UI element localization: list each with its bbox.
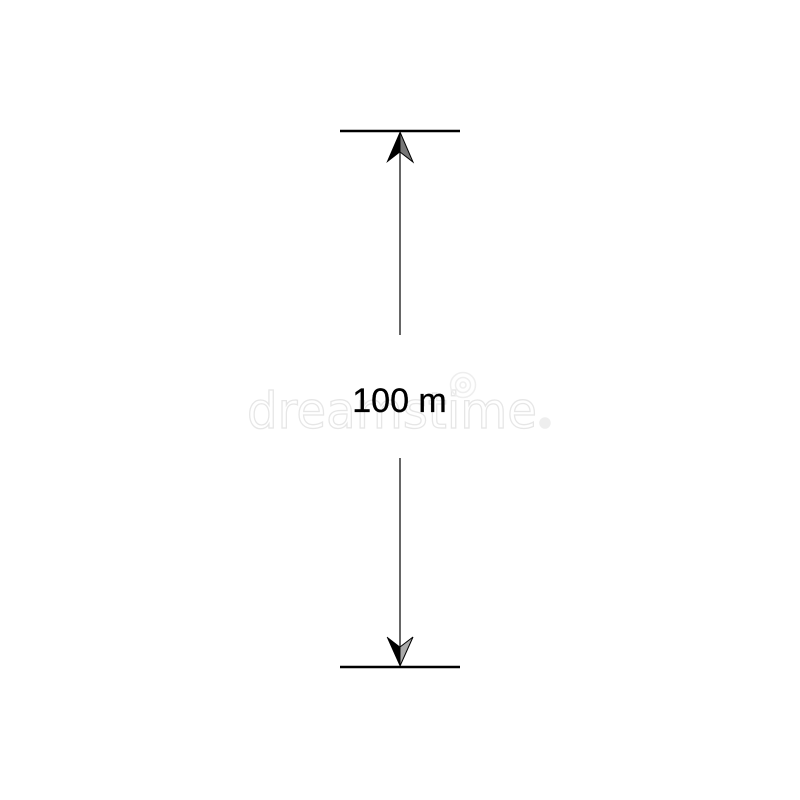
upper arrow	[387, 132, 413, 335]
bottom boundary line	[340, 666, 460, 668]
top boundary line	[340, 130, 460, 132]
watermark: dreamstime	[247, 382, 537, 440]
lower arrow	[387, 458, 413, 666]
dimension label: 100 m	[352, 382, 447, 420]
